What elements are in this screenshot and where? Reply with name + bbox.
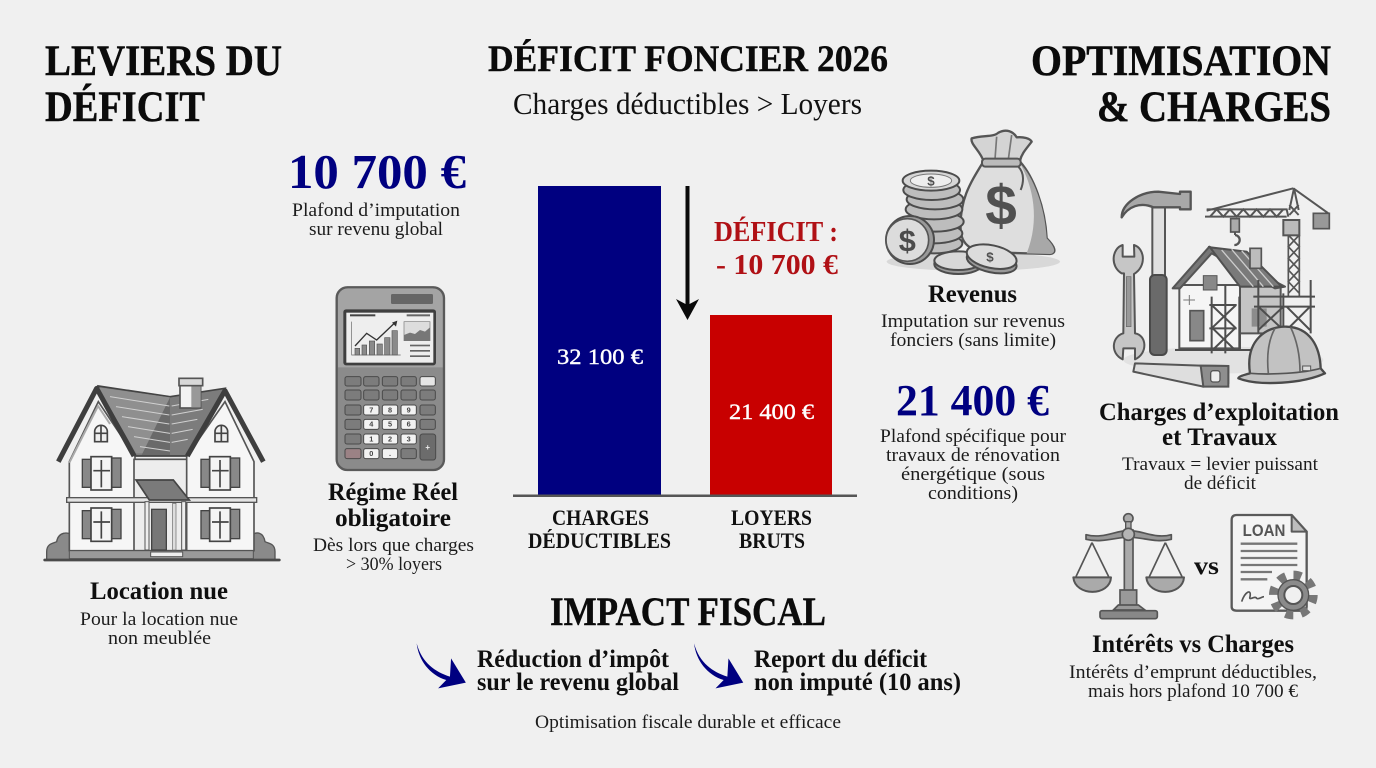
text: revenus [881, 281, 1065, 351]
chart baseline [513, 494, 857, 497]
title: left column heading: LEVIERS DU [45, 38, 282, 85]
heading: impact fiscal: IMPACT FISCAL [550, 589, 826, 634]
text: reduction d impot [477, 646, 679, 696]
stat: 21 400 euro ceiling: travaux de rénovation [886, 445, 1061, 466]
icon: calculator: 6 [407, 420, 411, 429]
text: regime reel: Régime Réel [328, 479, 458, 506]
text: charges d exploitation: Charges d’exploitation [1099, 399, 1339, 426]
icon: calculator: 2 [388, 434, 392, 443]
hammer [1122, 192, 1191, 355]
title: right column heading [1031, 38, 1331, 131]
icon: calculator: 0 [369, 449, 373, 458]
callout: deficit amount: - 10 700 € [716, 250, 838, 281]
stat: 10 700 euro ceiling: 10 700 € [288, 144, 466, 199]
stat: 10 700 euro ceiling: Plafond d’imputation [292, 200, 461, 221]
icon: calculator: 4 [369, 420, 374, 429]
icon: scales [1073, 514, 1184, 619]
axis label: loyers bruts [731, 505, 812, 553]
text: charges d exploitation: Travaux = levier puissant [1122, 454, 1319, 475]
stat: 10 700 euro ceiling: sur revenu global [309, 219, 443, 240]
icon: calculator: 7 [369, 405, 373, 414]
icon: calculator: 1 [369, 434, 373, 443]
text: regime reel: > 30% loyers [346, 554, 442, 575]
text: location nue [80, 578, 238, 649]
icon: calculator: 3 [407, 434, 411, 443]
icon: money bag and coins: $ [927, 174, 935, 189]
callout: deficit amount [714, 217, 838, 281]
title: right column heading: & CHARGES [1097, 84, 1331, 131]
text: location nue: non meublée [108, 628, 211, 649]
icon: money bag and coins: $ [985, 175, 1017, 238]
text: reduction d impot: sur le revenu global [477, 669, 679, 696]
bar: charges deductibles [538, 186, 661, 495]
bar: loyers bruts [710, 315, 832, 495]
axis label: charges deductibles: DÉDUCTIBLES [528, 528, 671, 553]
text: report du deficit: non imputé (10 ans) [754, 669, 961, 696]
icon: house [43, 378, 281, 561]
stat: 21 400 euro ceiling [880, 376, 1067, 504]
icon: curved arrow 1 [417, 643, 466, 688]
icon: tools and construction [1114, 188, 1329, 387]
saw [1133, 363, 1228, 387]
text: charges d exploitation [1099, 399, 1339, 494]
callout: deficit amount: DÉFICIT : [714, 217, 838, 248]
icon: curved arrow 2 [694, 643, 743, 688]
text: revenus: Imputation sur revenus [881, 311, 1065, 332]
text: location nue: Location nue [90, 578, 228, 605]
icon: loan document and gear: LOAN [1243, 521, 1285, 540]
text: regime reel [313, 479, 474, 575]
text: revenus: Revenus [928, 281, 1017, 308]
text: regime reel: obligatoire [335, 505, 451, 532]
axis label: charges deductibles [528, 505, 671, 553]
icon: money bag and coins: $ [986, 249, 994, 264]
stat: 21 400 euro ceiling: Plafond spécifique pour [880, 426, 1067, 447]
stat: 21 400 euro ceiling: énergétique (sous [901, 464, 1045, 485]
text: report du deficit: Report du déficit [754, 646, 928, 673]
bar chart: charges vs loyers [513, 186, 857, 553]
icon: money bag and coins: $ [899, 224, 916, 258]
icon: calculator: . [389, 449, 391, 458]
icon: calculator [337, 287, 444, 470]
text: report du deficit [754, 646, 961, 696]
icon: calculator: 9 [407, 405, 411, 414]
icon: calculator: + [425, 443, 430, 452]
arrow: deficit gap [676, 186, 699, 320]
icon: calculator: 5 [388, 420, 392, 429]
label: vs: vs [1194, 553, 1219, 580]
axis label: loyers bruts: BRUTS [739, 528, 805, 553]
stat: 21 400 euro ceiling: 21 400 € [896, 376, 1049, 425]
text: interets vs charges: mais hors plafond 10 700 € [1088, 681, 1298, 702]
text: regime reel: Dès lors que charges [313, 535, 474, 556]
bar value: 32 100: 32 100 € [557, 344, 643, 369]
text: location nue: Pour la location nue [80, 609, 238, 630]
wrench [1114, 245, 1144, 359]
text: interets vs charges [1069, 631, 1317, 702]
icon: money bag and coins [886, 131, 1060, 277]
title: left column heading [45, 38, 282, 131]
text: interets vs charges: Intérêts d’emprunt déductibles, [1069, 662, 1317, 683]
axis label: loyers bruts: LOYERS [731, 505, 812, 530]
stat: 21 400 euro ceiling: conditions) [928, 483, 1018, 504]
text: reduction d impot: Réduction d’impôt [477, 646, 670, 673]
icon: loan document and gear [1232, 515, 1313, 615]
icon: calculator: 8 [388, 405, 392, 414]
text: charges d exploitation: de déficit [1184, 473, 1257, 494]
text: optimisation fiscale: Optimisation fiscale durable et efficace [535, 712, 841, 733]
title: right column heading: OPTIMISATION [1031, 38, 1331, 85]
text: revenus: fonciers (sans limite) [890, 330, 1056, 351]
title: left column heading: DÉFICIT [45, 84, 205, 131]
title: centre heading [488, 38, 888, 121]
axis label: charges deductibles: CHARGES [552, 505, 649, 530]
bar value: 21 400: 21 400 € [729, 399, 814, 424]
title: centre heading: DÉFICIT FONCIER 2026 [488, 38, 888, 80]
text: interets vs charges: Intérêts vs Charges [1092, 631, 1294, 658]
text: charges d exploitation: et Travaux [1162, 424, 1277, 451]
stat: 10 700 euro ceiling [288, 144, 466, 240]
title: centre heading: Charges déductibles > Loyers [513, 86, 862, 121]
